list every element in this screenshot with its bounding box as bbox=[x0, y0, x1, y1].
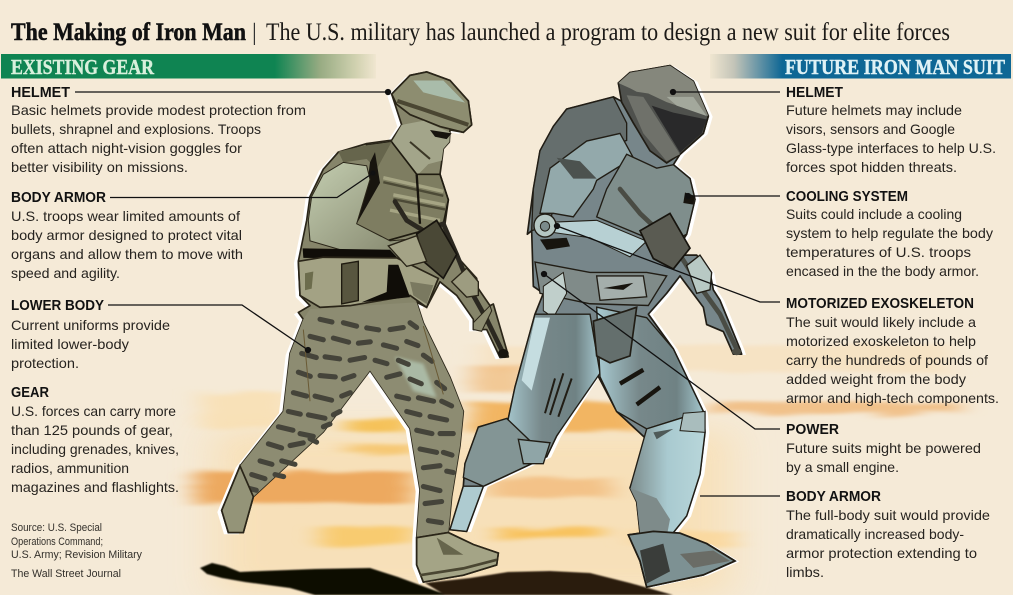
text block: existing body armor: body armor designed to protect vital bbox=[11, 227, 242, 243]
text block: cooling system: system to help regulate the body bbox=[786, 225, 993, 241]
text block: future helmet: Future helmets may include bbox=[786, 102, 962, 118]
text block: existing body armor: U.S. troops wear limited amounts of bbox=[11, 208, 240, 224]
text block: existing lower body: LOWER BODY bbox=[11, 298, 104, 314]
text block: cooling system bbox=[786, 189, 993, 279]
source credit: Source: U.S. Special bbox=[11, 522, 102, 534]
text block: power: POWER bbox=[786, 422, 840, 438]
text block: existing lower body: protection. bbox=[11, 355, 79, 371]
text block: future body armor: BODY ARMOR bbox=[786, 489, 881, 505]
text block: future helmet: forces spot hidden threats. bbox=[786, 159, 957, 175]
text block: motorized exoskeleton: added weight from the body bbox=[786, 371, 966, 387]
text block: existing helmet: bullets, shrapnel and explosions. Troops bbox=[11, 121, 261, 137]
text block: existing helmet: better visibility on missions. bbox=[11, 159, 188, 175]
source credit: The Wall Street Journal bbox=[11, 568, 121, 580]
ground shadows bbox=[200, 563, 673, 595]
soldier: existing gear figure bbox=[217, 72, 509, 584]
text block: existing gear: than 125 pounds of gear, bbox=[11, 422, 173, 438]
soldier armor vest bbox=[338, 142, 448, 241]
exosuit rifle and hand bbox=[620, 189, 741, 355]
text block: existing lower body bbox=[11, 298, 170, 371]
text block: existing body armor: organs and allow them to move with bbox=[11, 246, 243, 262]
text block: existing gear: including grenades, knives, bbox=[11, 441, 179, 457]
soldier boots bbox=[222, 466, 498, 582]
text block: cooling system: Suits could include a cooling bbox=[786, 206, 962, 222]
banner: existing gear: EXISTING GEAR bbox=[11, 55, 155, 79]
text block: motorized exoskeleton: motorized exoskeleton to help bbox=[786, 333, 976, 349]
text block: future body armor: limbs. bbox=[786, 564, 824, 580]
source credit: Operations Command; bbox=[11, 536, 103, 548]
text block: motorized exoskeleton bbox=[786, 296, 999, 406]
exosuit waist bbox=[535, 238, 667, 318]
text block: cooling system: COOLING SYSTEM bbox=[786, 189, 908, 205]
text block: motorized exoskeleton: armor and high-tech components. bbox=[786, 390, 999, 406]
exosuit helmet bbox=[618, 66, 708, 163]
text block: motorized exoskeleton: MOTORIZED EXOSKELETON bbox=[786, 296, 974, 312]
exosuit chest bbox=[597, 154, 695, 245]
text block: existing helmet bbox=[11, 85, 306, 175]
text block: power bbox=[786, 422, 981, 475]
text block: existing body armor bbox=[11, 190, 243, 281]
text block: existing lower body: Current uniforms provide bbox=[11, 317, 170, 333]
exosuit boot bbox=[628, 531, 735, 587]
text block: cooling system: temperatures of U.S. troops bbox=[786, 244, 971, 260]
exosuit backpack bbox=[532, 97, 627, 231]
text block: future body armor bbox=[786, 489, 990, 580]
text block: future body armor: The full-body suit would provide bbox=[786, 507, 990, 523]
text block: motorized exoskeleton: The suit would likely include a bbox=[786, 314, 976, 330]
text block: existing gear: GEAR bbox=[11, 385, 49, 401]
text block: existing body armor: BODY ARMOR bbox=[11, 190, 106, 206]
text block: existing helmet: HELMET bbox=[11, 85, 70, 101]
soldier camouflage trousers bbox=[240, 302, 463, 538]
callout lines, right side bbox=[542, 90, 780, 496]
text block: future body armor: armor protection extending to bbox=[786, 545, 977, 561]
banner: existing gear bbox=[1, 54, 376, 79]
text block: future helmet bbox=[786, 85, 996, 175]
title: | bbox=[252, 20, 257, 46]
text block: existing body armor: speed and agility. bbox=[11, 265, 120, 281]
text block: future body armor: dramatically increased body- bbox=[786, 526, 964, 542]
text block: existing gear: magazines and flashlights. bbox=[11, 479, 179, 495]
exosuit rear leg bbox=[450, 314, 600, 531]
title bbox=[11, 19, 950, 46]
watercolor desert landscape bbox=[195, 345, 960, 595]
exosuit shoulder and arm bbox=[534, 133, 647, 257]
text block: power: by a small engine. bbox=[786, 459, 899, 475]
text block: future helmet: visors, sensors and Google bbox=[786, 121, 955, 137]
text block: existing gear bbox=[11, 385, 179, 495]
text block: future helmet: Glass-type interfaces to help U.S. bbox=[786, 140, 996, 156]
text block: future helmet: HELMET bbox=[786, 85, 843, 101]
text block: cooling system: encased in the the body armor. bbox=[786, 263, 979, 279]
source credit bbox=[11, 522, 142, 580]
text block: motorized exoskeleton: carry the hundreds of pounds of bbox=[786, 352, 988, 368]
soldier rifle and gloves bbox=[388, 202, 509, 358]
text block: existing lower body: limited lower-body bbox=[11, 336, 129, 352]
text block: power: Future suits might be powered bbox=[786, 440, 981, 456]
cooling unit bbox=[683, 193, 695, 205]
text block: existing gear: radios, ammunition bbox=[11, 460, 129, 476]
title: The Making of Iron Man bbox=[11, 19, 246, 46]
source credit: U.S. Army; Revision Military bbox=[11, 549, 142, 561]
text block: existing gear: U.S. forces can carry more bbox=[11, 403, 176, 419]
exosuit front leg bbox=[593, 307, 705, 537]
text block: existing helmet: often attach night-vision goggles for bbox=[11, 140, 242, 156]
exosuit: future Iron Man figure bbox=[450, 66, 746, 588]
soldier belt and pouches bbox=[298, 248, 438, 307]
soldier arm bbox=[308, 162, 423, 261]
soldier face and neck bbox=[392, 121, 452, 174]
callout lines, left side bbox=[75, 90, 390, 352]
soldier helmet bbox=[392, 72, 472, 132]
text block: existing helmet: Basic helmets provide modest protection from bbox=[11, 102, 306, 118]
